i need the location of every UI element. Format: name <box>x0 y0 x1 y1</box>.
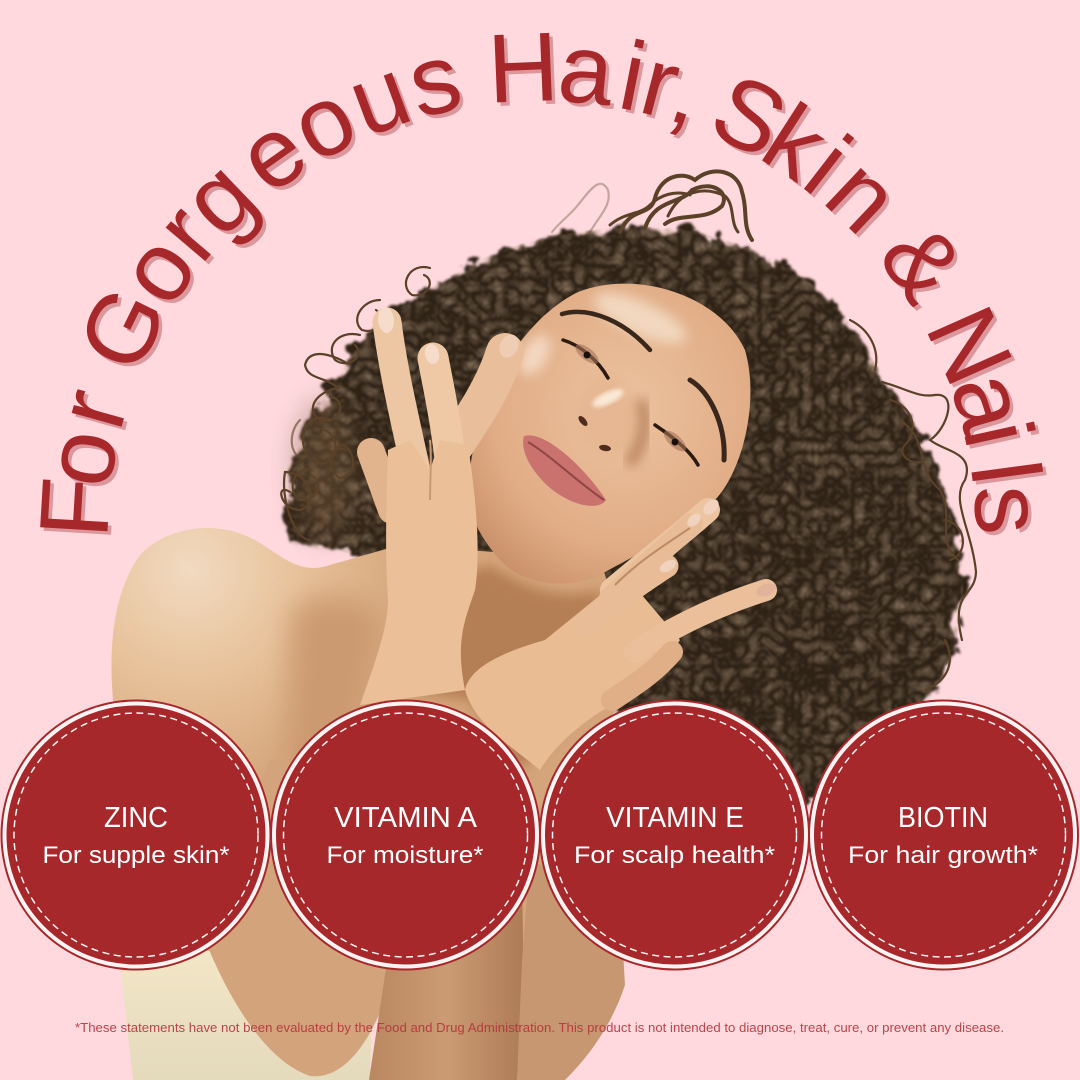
eye right <box>655 425 698 465</box>
eyebrow right <box>690 380 724 460</box>
label: vitamin a: VITAMIN A <box>334 802 478 834</box>
neck shadow <box>400 565 610 770</box>
crossed arm two <box>369 880 524 1080</box>
shoulder and torso <box>111 528 640 990</box>
title shadow: For Gorgeous Hair, Skin & Nails <box>22 14 1069 544</box>
forehead highlight <box>588 283 692 353</box>
left hand <box>360 306 522 705</box>
fingernails <box>377 306 395 334</box>
badge: biotin <box>808 700 1079 970</box>
camisole <box>120 950 372 1080</box>
footnote disclaimer: *These statements have not been evaluated by the Food and Drug Administration. This product is not intended to diagnose, treat, cure, or prevent any disease. <box>75 1021 1004 1035</box>
label: zinc: ZINC <box>104 802 168 834</box>
eyebrow left <box>562 312 650 350</box>
finger creases <box>429 440 432 500</box>
label: vitamin e: VITAMIN E <box>606 802 744 834</box>
cheek highlight <box>514 330 556 380</box>
nose <box>574 370 640 458</box>
lips <box>523 435 606 506</box>
title text: For Gorgeous Hair, Skin & Nails <box>18 11 1066 540</box>
face <box>469 283 750 584</box>
eye left <box>563 340 608 378</box>
chest shadow <box>285 596 385 800</box>
finger separations <box>615 528 690 585</box>
right hand <box>465 496 777 770</box>
label: biotin: BIOTIN <box>898 802 988 834</box>
fingernails right <box>755 581 777 599</box>
badge: vitamin a <box>270 700 541 970</box>
benefit: moisture: For moisture* <box>326 842 484 869</box>
badge: zinc <box>0 700 272 970</box>
photo: woman with curly hair <box>111 171 976 1080</box>
crossed arm one <box>205 760 400 1076</box>
curved title <box>18 11 1069 544</box>
crossed arm three <box>517 860 625 1080</box>
lighter fringe left <box>295 400 355 540</box>
hair <box>287 227 963 800</box>
benefit: supple skin: For supple skin* <box>42 842 230 869</box>
benefit: hair growth: For hair growth* <box>848 842 1038 869</box>
badge: vitamin e <box>539 700 810 970</box>
curly flyaway strands <box>281 171 976 690</box>
benefit: scalp health: For scalp health* <box>574 842 775 869</box>
